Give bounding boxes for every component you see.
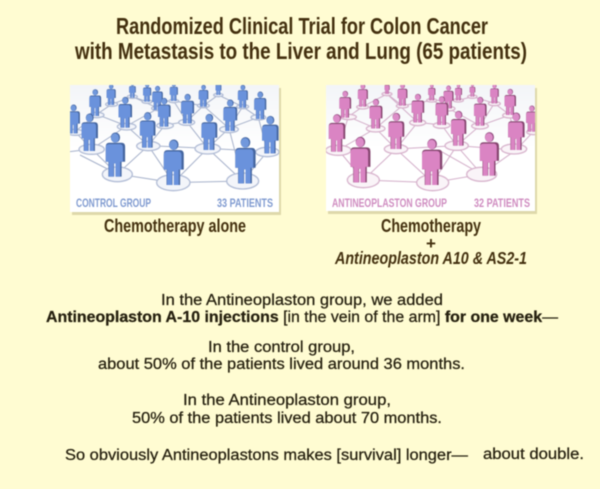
- text: control group result: In the control group,: [208, 339, 355, 356]
- label: antineoplaston group: ANTINEOPLASTON GROUP: [332, 196, 447, 210]
- caption: chemotherapy plus antineoplaston: Antineoplaston A10 & AS2-1: [334, 248, 527, 268]
- text: treatment description: In the Antineoplaston group, we added: [161, 292, 443, 309]
- text: antineoplaston group result: In the Antineoplaston group,: [183, 392, 391, 409]
- text: treatment description: Antineoplaston A-10 injections [in the vein of the arm] for one week—: [46, 309, 559, 326]
- text: conclusion: So obviously Antineoplastons makes [survival] longer—: [65, 447, 469, 464]
- title: [74, 13, 527, 64]
- text: control group result: [98, 339, 465, 373]
- text: conclusion: about double.: [483, 446, 584, 463]
- text: control group result: about 50% of the patients lived around 36 months.: [98, 356, 465, 373]
- caption: chemotherapy plus antineoplaston: [334, 216, 527, 268]
- panel: control group: [67, 82, 281, 215]
- caption: chemotherapy plus antineoplaston: +: [426, 234, 436, 253]
- panel: antineoplaston group: [326, 82, 540, 214]
- label: control group: CONTROL GROUP: [76, 196, 151, 210]
- text: antineoplaston group result: 50% of the patients lived about 70 months.: [132, 410, 442, 427]
- text: antineoplaston group result: [132, 392, 442, 427]
- network of 32 antineoplaston patients: [326, 82, 540, 191]
- title: Randomized Clinical Trial for Colon Cancer: [116, 13, 488, 39]
- caption: chemotherapy plus antineoplaston: Chemotherapy: [381, 216, 481, 236]
- label: 32 patients: 32 PATIENTS: [474, 196, 530, 210]
- text: treatment description: [46, 292, 559, 326]
- text: conclusion: [65, 446, 584, 464]
- network of 33 control patients: [67, 82, 279, 191]
- label: 33 patients: 33 PATIENTS: [217, 196, 273, 210]
- caption: chemotherapy alone: Chemotherapy alone: [104, 216, 246, 236]
